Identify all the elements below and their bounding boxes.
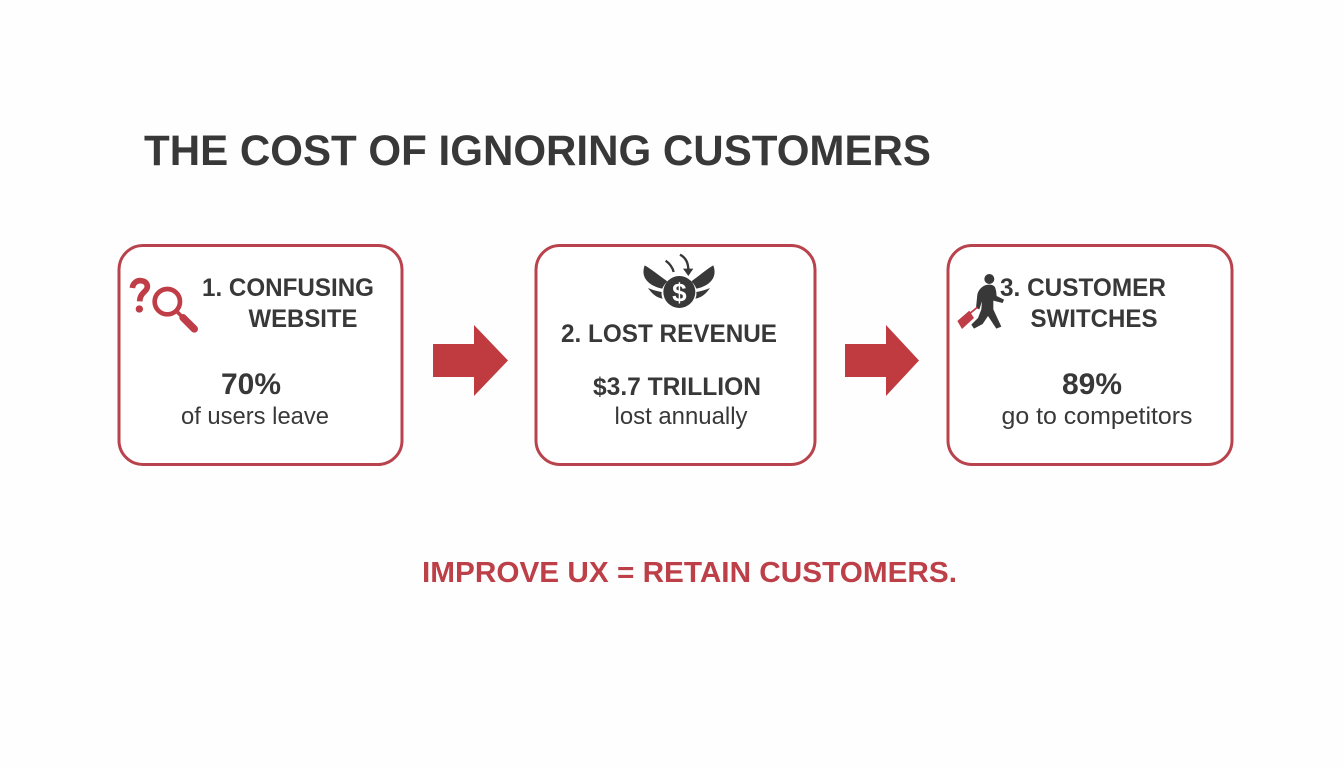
panel: confusing website <box>119 246 402 464</box>
caption: of users leave: of users leave <box>181 403 329 430</box>
heading: confusing website: WEBSITE <box>248 305 358 333</box>
arrow: step 1 to 2 <box>433 325 508 396</box>
icon: question mark and magnifying glass <box>132 281 194 329</box>
arrow: step 2 to 3 <box>845 325 919 396</box>
panel: customer switches <box>948 246 1232 464</box>
stat: 70%: 70% <box>221 368 281 401</box>
title: THE COST OF IGNORING CUSTOMERS <box>144 127 931 175</box>
panel: lost revenue <box>536 246 815 464</box>
heading: customer switches: SWITCHES <box>1030 305 1158 333</box>
icon: winged dollar coin: $ <box>672 277 687 307</box>
heading: lost revenue: 2. LOST REVENUE <box>561 320 777 348</box>
icon: winged dollar coin <box>643 255 715 308</box>
stat: $3.7 trillion: $3.7 TRILLION <box>593 373 761 401</box>
caption: lost annually: lost annually <box>614 403 748 430</box>
heading: confusing website: 1. CONFUSING <box>202 274 374 302</box>
caption: go to competitors: go to competitors <box>1002 403 1192 430</box>
heading: customer switches: 3. CUSTOMER <box>1000 274 1166 302</box>
conclusion: IMPROVE UX = RETAIN CUSTOMERS. <box>422 557 957 589</box>
stat: 89%: 89% <box>1062 368 1122 401</box>
icon: person walking with suitcase <box>957 274 1004 329</box>
